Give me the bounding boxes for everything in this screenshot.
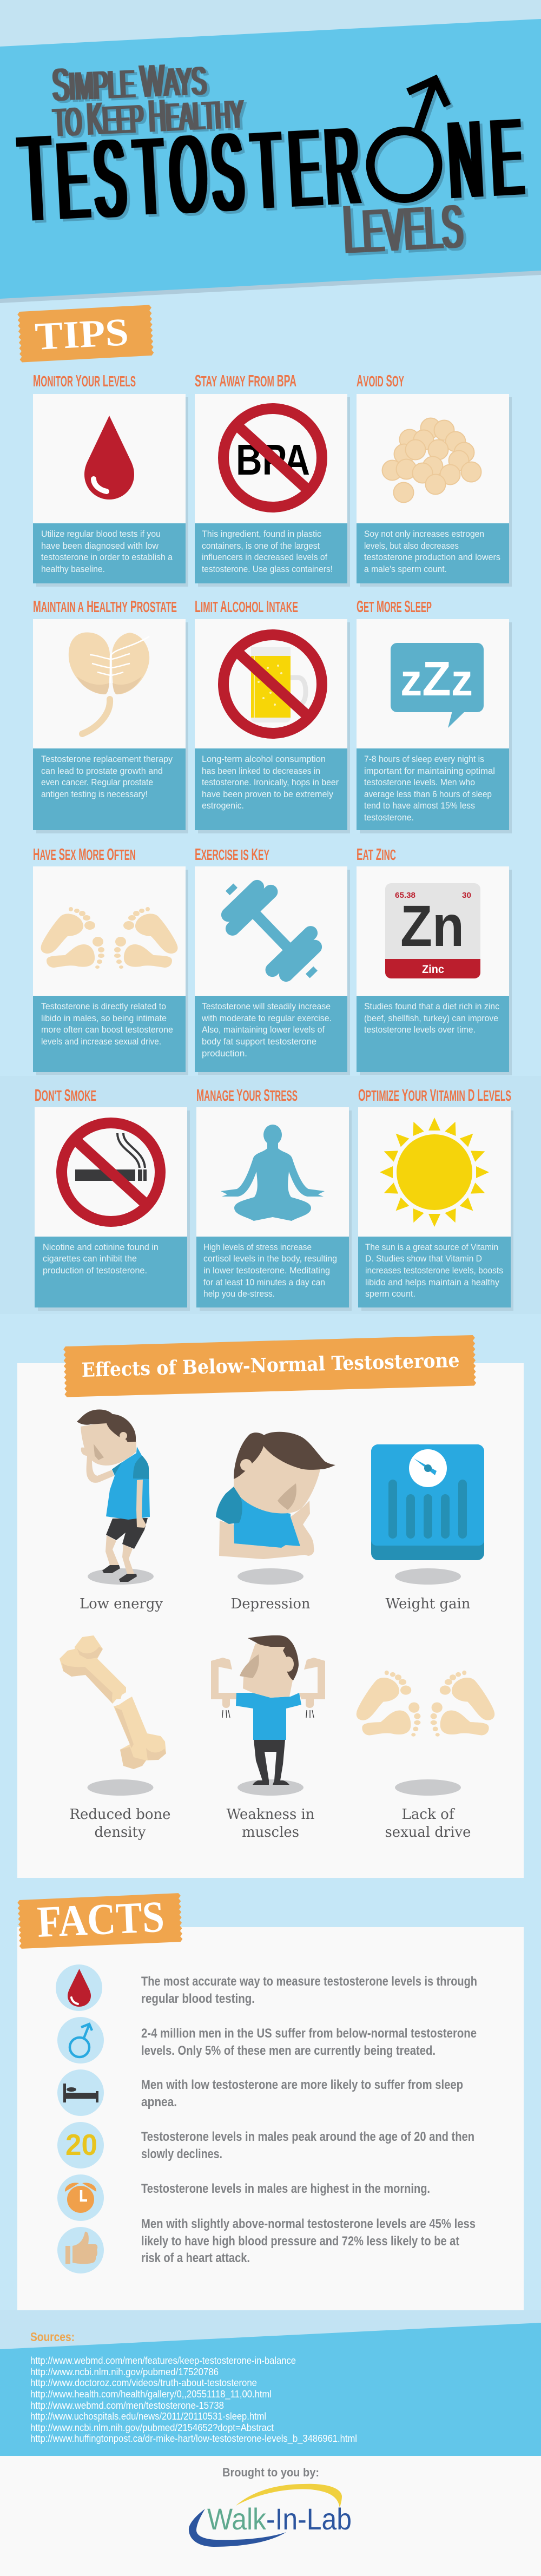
text: sleep: tend to have almost 15% less bbox=[364, 800, 475, 811]
main word testosterone: S bbox=[91, 116, 128, 240]
text: zinc: Studies found that a diet rich in zinc bbox=[364, 1001, 499, 1011]
fact 1: The most accurate way to measure testosterone levels is through bbox=[141, 1974, 477, 1989]
panel: eat zinc: EAT ZINC bbox=[357, 845, 396, 864]
subtitle: simple ways: SIMPLE WAYS bbox=[51, 54, 207, 111]
text: zinc: (beef, shellfish, turkey) can improve bbox=[364, 1013, 498, 1023]
text: exercise: production. bbox=[202, 1048, 247, 1059]
fact 6: Men with slightly above-normal testosterone levels are 45% less bbox=[141, 2217, 476, 2231]
text: bpa: containers, is one of the largest bbox=[202, 541, 320, 551]
subtitle: to keep healthy: TO KEEP HEALTHY bbox=[52, 87, 245, 147]
subtitle: levels: LEVELS bbox=[341, 186, 464, 268]
text: alcohol: estrogenic. bbox=[202, 800, 244, 811]
main word testosterone: S bbox=[209, 110, 246, 234]
text: alcohol: have been proven to be extremely bbox=[202, 789, 333, 799]
icon: zinc periodic tile: 65.38 bbox=[395, 891, 415, 900]
text: smoke bbox=[43, 1242, 159, 1276]
figure: weakness in muscles bbox=[211, 1635, 325, 1841]
panel: optimize your vitamin d levels bbox=[358, 1086, 513, 1311]
text: vitamin d: sperm count. bbox=[365, 1289, 415, 1299]
logo: walk-in-lab bbox=[189, 2484, 352, 2547]
fact 6: likely to have high blood pressure and 72% less likely to be at bbox=[141, 2234, 459, 2249]
icon: thumbs up bbox=[65, 2232, 97, 2264]
text: smoke: cigarettes can inhibit the bbox=[43, 1253, 137, 1264]
icon: drop bbox=[68, 1969, 91, 2007]
fact 6: risk of a heart attack. bbox=[141, 2251, 250, 2265]
figure: weight gain bbox=[371, 1444, 484, 1612]
text: monitor: Utilize regular blood tests if you bbox=[41, 529, 161, 539]
icon: male bbox=[70, 2024, 92, 2057]
ribbon: tips bbox=[17, 305, 154, 363]
figure: reduced bone density: Reduced bone bbox=[69, 1806, 171, 1823]
text: exercise: Also, maintaining lower levels of bbox=[202, 1024, 325, 1035]
main word testosterone: T bbox=[249, 108, 285, 232]
panel: have sex more often bbox=[33, 845, 188, 1075]
fact 1: regular blood testing. bbox=[141, 1992, 255, 2006]
icon: no bpa: BPA bbox=[236, 436, 310, 484]
panel: avoid soy: AVOID SOY bbox=[357, 371, 404, 390]
icon: zinc periodic tile bbox=[385, 883, 480, 978]
text: zinc bbox=[364, 1001, 499, 1035]
sources heading: Sources: bbox=[30, 2330, 75, 2344]
text: vitamin d: increases testosterone levels, boosts bbox=[365, 1265, 503, 1276]
figure: weight gain: Weight gain bbox=[385, 1596, 471, 1612]
icon: zinc periodic tile: 30 bbox=[462, 891, 471, 900]
text: bpa bbox=[202, 529, 333, 574]
panel: exercise is key: EXERCISE IS KEY bbox=[195, 845, 269, 864]
text: sex bbox=[41, 1001, 173, 1047]
icon: zinc periodic tile: Zn bbox=[400, 893, 464, 958]
icon: sun bbox=[380, 1118, 489, 1227]
text: sleep: average less than 6 hours of sleep bbox=[364, 789, 492, 799]
text: prostate: antigen testing is necessary! bbox=[41, 789, 148, 799]
text: sex: levels and increase sexual drive. bbox=[41, 1036, 161, 1047]
fact 6 bbox=[57, 2217, 476, 2273]
text: monitor: healthy baseline. bbox=[41, 564, 105, 574]
panel: effects bbox=[17, 1335, 524, 1878]
fact 3: Men with low testosterone are more likely to suffer from sleep bbox=[141, 2078, 463, 2092]
icon: blood drop bbox=[84, 416, 134, 500]
source links: http://www.webmd.com/men/features/keep-testosterone-in-balance bbox=[30, 2355, 296, 2366]
text: bpa: This ingredient, found in plastic bbox=[202, 529, 321, 539]
fact 3 bbox=[57, 2069, 463, 2116]
panel: eat zinc bbox=[357, 845, 512, 1075]
figure: lack of sexual drive: sexual drive bbox=[385, 1824, 471, 1841]
panel: optimize your vitamin d levels: OPTIMIZE YOUR VITAMIN D LEVELS bbox=[358, 1086, 511, 1105]
panel: get more sleep bbox=[357, 597, 512, 833]
main word testosterone: N bbox=[445, 97, 485, 221]
icon: dumbbell bbox=[206, 864, 338, 998]
text: stress bbox=[203, 1242, 337, 1299]
text: sex: libido in males, so being intimate bbox=[41, 1013, 167, 1023]
figure: low energy bbox=[77, 1410, 163, 1612]
source links: http://www.huffingtonpost.ca/dr-mike-hart/low-testosterone-levels_b_3486961.html bbox=[30, 2433, 357, 2444]
text: smoke: production of testosterone. bbox=[43, 1265, 147, 1276]
figure: reduced bone density bbox=[60, 1635, 171, 1841]
brought to you by: Brought to you by: bbox=[222, 2466, 319, 2479]
text: soy: Soy not only increases estrogen bbox=[364, 529, 484, 539]
panel: facts bbox=[17, 1892, 524, 2310]
fact 5 bbox=[57, 2174, 430, 2221]
text: stress: in lower testosterone. Meditating bbox=[203, 1265, 330, 1276]
panel: get more sleep: GET MORE SLEEP bbox=[357, 597, 432, 616]
text: vitamin d bbox=[365, 1242, 503, 1299]
text: prostate: can lead to prostate growth and bbox=[41, 766, 163, 776]
text: alcohol bbox=[202, 754, 339, 811]
text: zinc: testosterone levels over time. bbox=[364, 1024, 476, 1035]
text: prostate: Testosterone replacement therapy bbox=[41, 754, 173, 764]
text: monitor: have been diagnosed with low bbox=[41, 541, 159, 551]
panel: stay away from bpa: STAY AWAY FROM BPA bbox=[195, 371, 296, 390]
text: sleep bbox=[364, 754, 495, 823]
icon: number 20: 20 bbox=[65, 2128, 97, 2161]
text: exercise: body fat support testosterone bbox=[202, 1036, 316, 1047]
text: prostate: even cancer. Regular prostate bbox=[41, 777, 153, 787]
icon: meditating person bbox=[221, 1125, 325, 1221]
panel: stay away from bpa bbox=[195, 371, 350, 587]
header banner bbox=[0, 19, 541, 303]
figure: weakness in muscles: muscles bbox=[242, 1824, 299, 1841]
figure: reduced bone density: density bbox=[94, 1824, 146, 1841]
text: stress: cortisol levels in the body, resulting bbox=[203, 1253, 337, 1264]
ribbon: effects heading bbox=[63, 1335, 476, 1397]
text: alcohol: Long-term alcohol consumption bbox=[202, 754, 326, 764]
text: soy bbox=[364, 529, 500, 574]
footer bbox=[0, 2456, 541, 2576]
text: sex: more often can boost testosterone bbox=[41, 1024, 173, 1035]
icon: male symbol bbox=[370, 80, 447, 199]
main word testosterone: E bbox=[54, 118, 91, 242]
fact 2: levels. Only 5% of these men are currently being treated. bbox=[141, 2043, 436, 2058]
text: sleep: 7-8 hours of sleep every night is bbox=[364, 754, 484, 764]
fact 4: Testosterone levels in males peak around the age of 20 and then bbox=[141, 2130, 474, 2144]
source links: http://www.uchospitals.edu/news/2011/20110531-sleep.html bbox=[30, 2411, 266, 2422]
fact 4 bbox=[57, 2122, 474, 2168]
text: stress: High levels of stress increase bbox=[203, 1242, 312, 1252]
fact 1 bbox=[56, 1964, 477, 2011]
source links: http://www.webmd.com/men/testosterone-15738 bbox=[30, 2400, 224, 2411]
panel: don't smoke bbox=[35, 1086, 190, 1311]
ribbon: facts: FACTS bbox=[36, 1892, 166, 1947]
fact 3: apnea. bbox=[141, 2095, 177, 2110]
text: stress: help you de-stress. bbox=[203, 1289, 275, 1299]
panel: maintain a healthy prostate: MAINTAIN A HEALTHY PROSTATE bbox=[33, 597, 177, 616]
title bbox=[16, 54, 525, 268]
text: monitor bbox=[41, 529, 173, 574]
figure: lack of sexual drive bbox=[357, 1671, 494, 1841]
text: vitamin d: The sun is a great source of Vitamin bbox=[365, 1242, 498, 1252]
main word testosterone: O bbox=[167, 112, 209, 236]
fact 2: 2-4 million men in the US suffer from below-normal testosterone bbox=[141, 2026, 477, 2041]
text: sleep: testosterone. bbox=[364, 812, 414, 823]
panel: manage your stress: MANAGE YOUR STRESS bbox=[196, 1086, 298, 1105]
figure: depression: Depression bbox=[230, 1596, 311, 1612]
icon: no alcohol bbox=[223, 635, 322, 733]
figure: lack of sexual drive: Lack of bbox=[401, 1806, 456, 1823]
text: soy: levels, but also decreases bbox=[364, 541, 459, 551]
ribbon: effects heading: Effects of Below-Normal Testosterone bbox=[81, 1349, 460, 1382]
figure: low energy: Low energy bbox=[80, 1596, 163, 1612]
fact 2 bbox=[57, 2017, 477, 2064]
text: sex: Testosterone is directly related to bbox=[41, 1001, 166, 1011]
text: sleep: testosterone levels. Men who bbox=[364, 777, 475, 787]
panel: maintain a healthy prostate bbox=[33, 597, 188, 833]
icon: male symbol shadow bbox=[373, 82, 450, 201]
main word testosterone: T bbox=[132, 114, 167, 238]
main word testosterone: E bbox=[286, 106, 324, 230]
top light band bbox=[0, 0, 541, 70]
panel: have sex more often: HAVE SEX MORE OFTEN bbox=[33, 845, 136, 864]
fact 5: Testosterone levels in males are highest in the morning. bbox=[141, 2181, 430, 2196]
ribbon: tips: TIPS bbox=[34, 310, 130, 358]
sources band bbox=[0, 2310, 541, 2456]
text: smoke: Nicotine and cotinine found in bbox=[43, 1242, 159, 1252]
text: stress: for at least 10 minutes a day can bbox=[203, 1277, 325, 1287]
icon: no bpa bbox=[223, 409, 322, 507]
icon: alarm clock bbox=[65, 2183, 96, 2213]
icon: footprints bbox=[41, 907, 177, 969]
text: sleep: important for maintaining optimal bbox=[364, 766, 495, 776]
text: bpa: testosterone. Use glass containers! bbox=[202, 564, 333, 574]
source links: http://www.doctoroz.com/videos/truth-about-testosterone bbox=[30, 2377, 257, 2388]
panel: manage your stress bbox=[196, 1086, 352, 1311]
text: vitamin d: libido and helps maintain a healthy bbox=[365, 1277, 499, 1287]
source links: http://www.ncbi.nlm.nih.gov/pubmed/17520786 bbox=[30, 2367, 219, 2377]
icon: zinc periodic tile: Zinc bbox=[422, 963, 444, 976]
icon: no smoking bbox=[62, 1123, 160, 1221]
icon: speech bubble zzz bbox=[391, 643, 484, 728]
text: exercise: with moderate to regular exercise. bbox=[201, 1013, 332, 1023]
text: soy: a male's sperm count. bbox=[364, 564, 447, 574]
panel: exercise is key bbox=[195, 845, 350, 1075]
figure: depression bbox=[216, 1432, 335, 1612]
text: monitor: testosterone in order to establish a bbox=[41, 552, 173, 562]
main word testosterone: R bbox=[322, 104, 362, 228]
icon: speech bubble zzz: zZz bbox=[400, 652, 473, 706]
text: bpa: influencers in decreased levels of bbox=[202, 552, 327, 562]
source links bbox=[30, 2355, 357, 2444]
icon: bed bbox=[63, 2084, 98, 2102]
text: alcohol: has been linked to decreases in bbox=[202, 766, 320, 776]
icon: prostate bbox=[69, 632, 149, 734]
main word testosterone: E bbox=[488, 95, 525, 219]
panel: avoid soy bbox=[357, 371, 512, 587]
main word testosterone: T bbox=[16, 109, 55, 247]
logo: walk-in-lab: Walk-In-Lab bbox=[207, 2502, 352, 2536]
panel: monitor your levels: MONITOR YOUR LEVELS bbox=[33, 371, 136, 390]
figure: weakness in muscles: Weakness in bbox=[226, 1806, 315, 1823]
fact 4: slowly declines. bbox=[141, 2147, 222, 2161]
source links: http://www.ncbi.nlm.nih.gov/pubmed/2154652?dopt=Abstract bbox=[30, 2422, 274, 2433]
main word testosterone bbox=[16, 84, 525, 247]
icon: soy beans bbox=[382, 418, 481, 502]
panel: monitor your levels bbox=[33, 371, 188, 587]
text: alcohol: testosterone. Ironically, hops in beer bbox=[202, 777, 339, 787]
text: prostate bbox=[41, 754, 173, 799]
source links: http://www.health.com/health/gallery/0,,20551118_11,00.html bbox=[30, 2389, 272, 2400]
text: vitamin d: D. Studies show that Vitamin D bbox=[365, 1253, 482, 1264]
text: exercise: Testosterone will steadily increase bbox=[202, 1001, 331, 1011]
text: exercise bbox=[201, 1001, 332, 1059]
panel: limit alcohol intake: LIMIT ALCOHOL INTAKE bbox=[195, 597, 298, 616]
text: soy: testosterone production and lowers bbox=[364, 552, 500, 562]
panel: limit alcohol intake bbox=[195, 597, 350, 833]
panel: don't smoke: DON'T SMOKE bbox=[35, 1086, 96, 1105]
lower tips tile tint bbox=[0, 1076, 541, 1314]
